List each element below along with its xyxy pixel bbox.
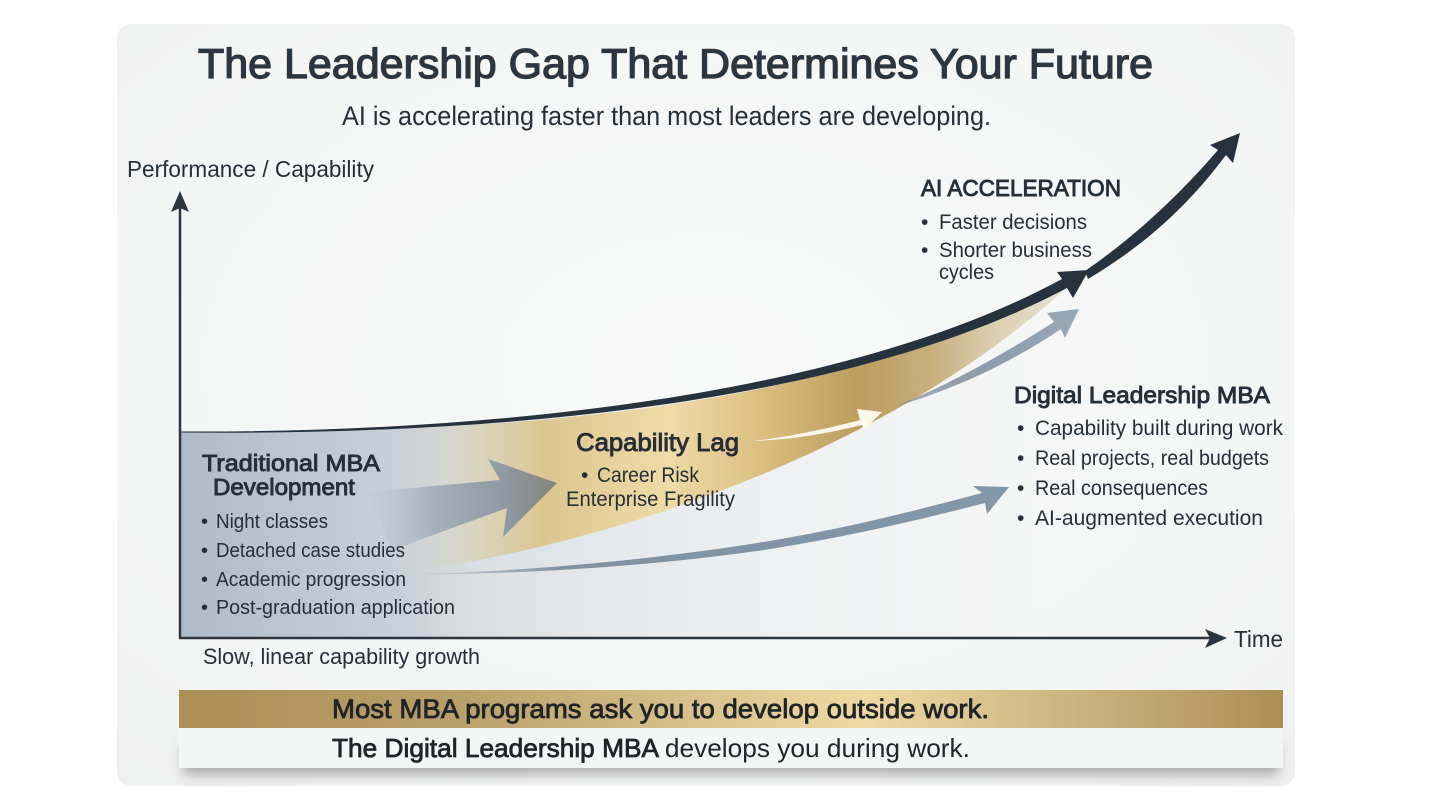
- title: The Leadership Gap That Determines Your Future: [198, 40, 1153, 87]
- x axis label: Time: [1234, 626, 1283, 652]
- text block: AI acceleration: cycles: [939, 261, 994, 284]
- text block: AI acceleration: •: [921, 211, 928, 234]
- text block: Traditional MBA Development: •: [201, 511, 208, 533]
- text block: Digital Leadership MBA: Real projects, real budgets: [1035, 447, 1269, 470]
- band: white statement: [179, 728, 1283, 768]
- text block: Traditional MBA Development: •: [201, 597, 208, 619]
- chart: leadership gap: [171, 133, 1240, 648]
- arrow: gap closing: [893, 309, 1079, 407]
- text block: Capability Lag: [566, 429, 739, 511]
- caption: slow linear growth: Slow, linear capability growth: [203, 644, 480, 669]
- text block: Traditional MBA Development: Traditional MBA: [202, 450, 381, 476]
- text block: Traditional MBA Development: Detached case studies: [216, 540, 405, 562]
- band: white statement: The Digital Leadership MBA develops you during work.: [332, 733, 970, 763]
- text block: Digital Leadership MBA: AI-augmented execution: [1035, 507, 1263, 530]
- band: gold statement: Most MBA programs ask you to develop outside work.: [332, 694, 989, 724]
- text block: Capability Lag: Capability Lag: [576, 429, 739, 457]
- text block: AI acceleration: AI ACCELERATION: [921, 175, 1121, 201]
- text block: Capability Lag: Career Risk: [597, 464, 699, 487]
- region: capability lag gold band: [400, 282, 1073, 573]
- text block: Digital Leadership MBA: Real consequences: [1035, 477, 1208, 500]
- text block: Digital Leadership MBA: •: [1017, 417, 1024, 440]
- text block: Traditional MBA Development: [201, 450, 455, 619]
- text block: AI acceleration: •: [921, 239, 928, 262]
- region: traditional MBA development fading right: [181, 282, 1073, 638]
- text block: Traditional MBA Development: Night classes: [216, 511, 328, 533]
- text block: Traditional MBA Development: Post-graduation application: [216, 597, 455, 619]
- text block: Traditional MBA Development: Development: [213, 474, 356, 500]
- x axis: [179, 629, 1227, 648]
- y axis label: Performance / Capability: [127, 156, 374, 182]
- band: gold statement: [179, 690, 1283, 728]
- text block: AI acceleration: [921, 175, 1121, 284]
- text block: Digital Leadership MBA: •: [1017, 477, 1024, 500]
- arrow: white lag arrow: [752, 409, 882, 441]
- text block: Digital Leadership MBA: [1014, 382, 1283, 530]
- panel: infographic card: [117, 24, 1295, 786]
- text block: Traditional MBA Development: •: [201, 540, 208, 562]
- text block: Capability Lag: •: [581, 464, 588, 487]
- text block: Digital Leadership MBA: •: [1017, 447, 1024, 470]
- arrow: digital leadership MBA: [412, 486, 1009, 574]
- text block: Traditional MBA Development: Academic progression: [216, 569, 406, 591]
- arrow: AI acceleration curve: [181, 133, 1240, 433]
- y axis: [171, 191, 189, 639]
- text block: AI acceleration: Shorter business: [939, 239, 1092, 262]
- text block: Capability Lag: Enterprise Fragility: [566, 488, 735, 511]
- text block: Digital Leadership MBA: Capability built during work: [1035, 417, 1283, 440]
- text block: Digital Leadership MBA: •: [1017, 507, 1024, 530]
- text block: Traditional MBA Development: •: [201, 569, 208, 591]
- text block: AI acceleration: Faster decisions: [939, 211, 1087, 234]
- panel: bottom banner: [179, 690, 1283, 775]
- text block: Digital Leadership MBA: Digital Leadership MBA: [1014, 382, 1271, 408]
- subtitle: AI is accelerating faster than most leaders are developing.: [342, 101, 991, 131]
- arrow: traditional development to capability lag: [367, 459, 557, 550]
